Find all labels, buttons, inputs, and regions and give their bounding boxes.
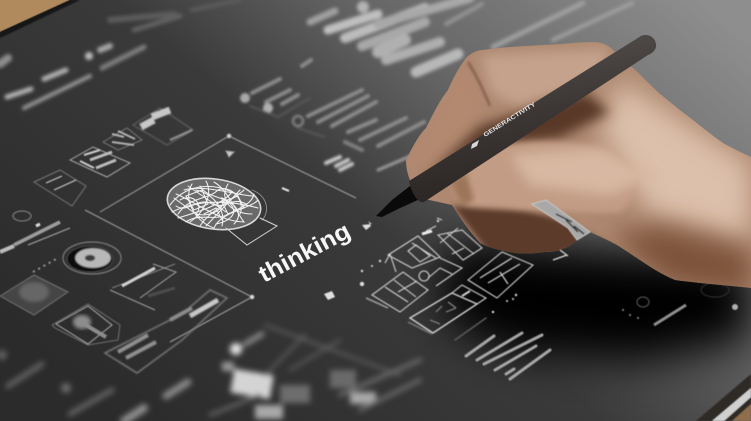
connector details xyxy=(419,271,429,281)
text block bottom right of plan xyxy=(455,318,550,379)
pen barrel xyxy=(409,35,656,202)
right back of hand light xyxy=(600,80,751,240)
index finger left face xyxy=(424,78,454,130)
thumb highlight xyxy=(510,148,660,195)
brain scribble globe icon xyxy=(164,173,277,245)
small marks near title xyxy=(324,221,372,300)
sketch fragment between fingers xyxy=(532,200,590,260)
palm underside shade xyxy=(610,225,751,295)
hand xyxy=(400,40,751,295)
wide card xyxy=(105,290,227,373)
thumb xyxy=(465,138,630,214)
pen xyxy=(376,35,656,217)
knuckle crease xyxy=(468,62,490,106)
blurred top right heading bars xyxy=(310,0,632,72)
scattered dots near plan xyxy=(360,220,517,313)
left capsule widget xyxy=(0,211,70,252)
wooden desk corner xyxy=(0,0,70,32)
dark shadow under the hand xyxy=(440,245,751,362)
chart card right of gauge xyxy=(110,264,176,310)
room bottom xyxy=(410,293,477,333)
diagram 2 xyxy=(70,147,130,177)
pen logo mark xyxy=(471,140,479,149)
blurred bottom centre diagram xyxy=(210,325,420,419)
hexagon shield xyxy=(52,304,120,345)
room right xyxy=(468,252,533,298)
room top right xyxy=(438,230,482,260)
middle finger xyxy=(452,202,608,254)
blurred bottom left elements xyxy=(0,350,188,421)
room upper xyxy=(388,236,440,268)
blurred cube left xyxy=(0,275,68,315)
index finger top light xyxy=(480,48,610,108)
pen label text: GENERACTIVITY xyxy=(483,102,537,139)
dotted connector xyxy=(33,258,58,272)
floor plan sketch xyxy=(366,218,533,334)
small diagrams upper left xyxy=(34,108,193,206)
tablet bottom right edge and stylus xyxy=(696,374,751,421)
diagram 3 xyxy=(103,128,142,150)
thumb tip shade xyxy=(450,172,474,206)
pen nib xyxy=(376,186,420,217)
left side diagrams xyxy=(0,211,227,373)
tablet top edge xyxy=(0,0,80,38)
thinking title: thinking xyxy=(254,218,355,288)
ring gauge xyxy=(63,242,121,274)
brain bracket lines xyxy=(226,218,277,245)
blurred top header bars xyxy=(0,0,240,108)
diagram 4 xyxy=(133,108,193,145)
small status icon and caption at right xyxy=(622,283,738,325)
diagram 1 xyxy=(34,170,86,206)
room lower left xyxy=(372,272,428,312)
blurred upper middle info blocks xyxy=(240,60,424,170)
skin base xyxy=(400,40,751,290)
central frame panel outline xyxy=(85,134,356,342)
shadow under pen xyxy=(425,92,610,178)
